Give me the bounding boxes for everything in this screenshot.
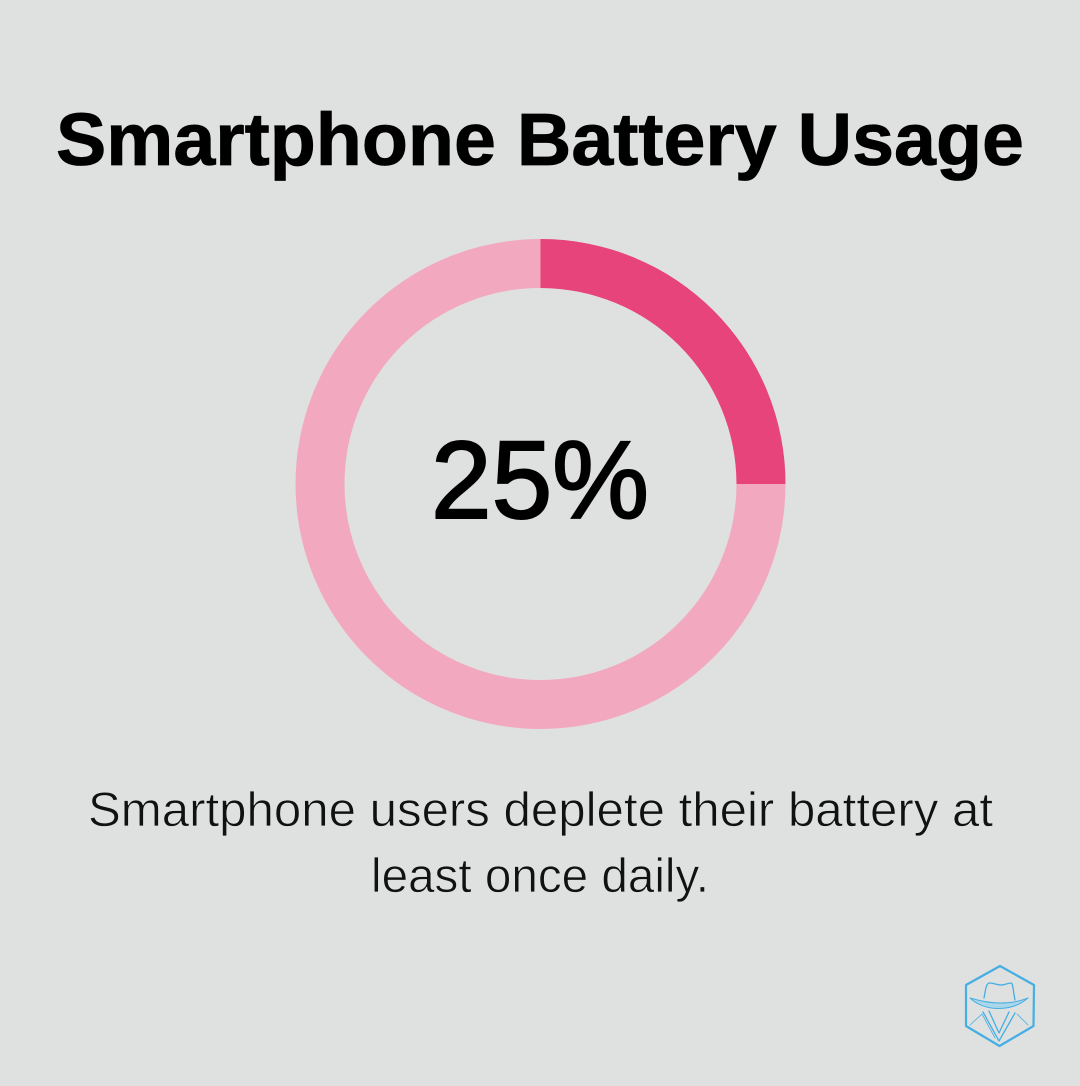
description text: least once daily. bbox=[371, 850, 709, 903]
center percentage: 25% bbox=[431, 419, 649, 542]
description text bbox=[88, 784, 993, 903]
donut chart: 25% bbox=[320, 239, 786, 704]
description text: Smartphone users deplete their battery at bbox=[88, 784, 993, 837]
donut highlighted segment bbox=[540, 239, 786, 484]
icon: logo hexagon with spy bbox=[966, 966, 1034, 1046]
title: Smartphone Battery Usage bbox=[56, 98, 1024, 181]
donut track bbox=[320, 264, 761, 704]
